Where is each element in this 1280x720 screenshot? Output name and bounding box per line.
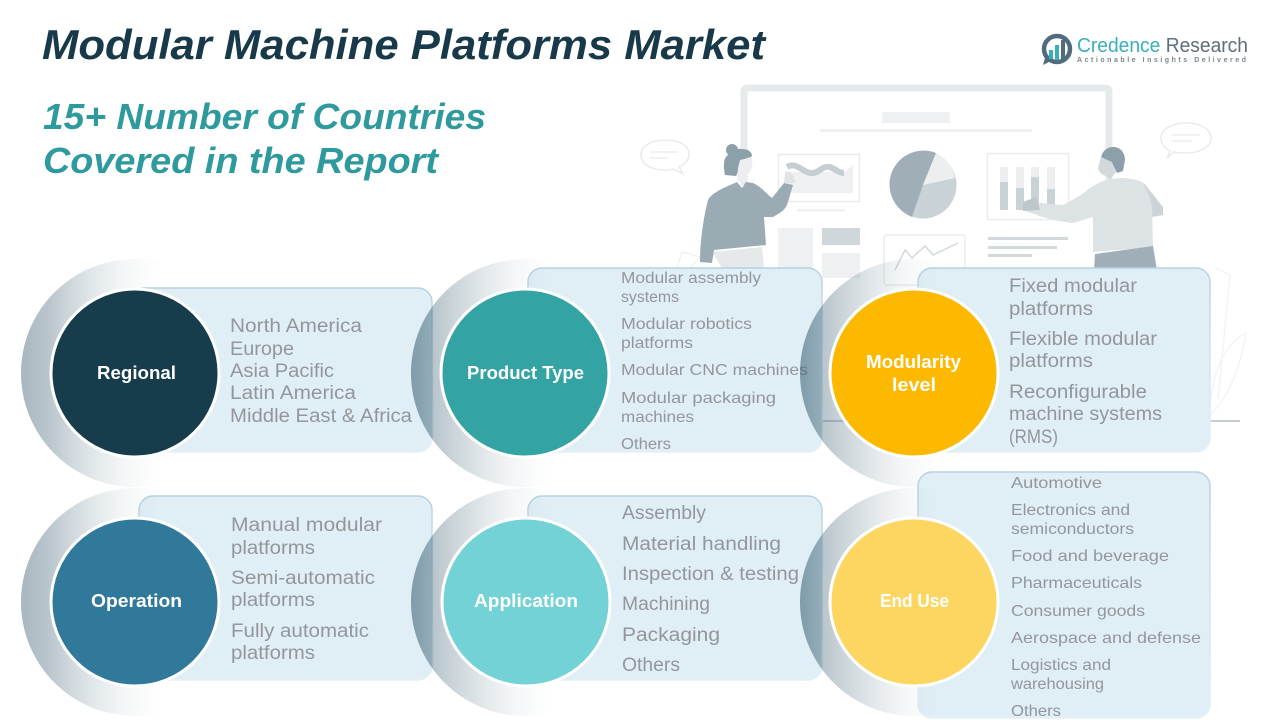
list: Fully automatic — [231, 621, 369, 642]
panel — [130, 288, 432, 452]
circle badge — [51, 518, 219, 686]
list: Others — [622, 655, 680, 676]
list: Manual modular — [231, 515, 383, 536]
circle badge — [830, 289, 998, 457]
panel — [918, 268, 1210, 452]
logo icon — [1043, 36, 1070, 65]
list: Material handling — [622, 534, 781, 555]
pie chart — [889, 151, 956, 218]
logo tagline: Actionable Insights Delivered — [1077, 57, 1246, 64]
list — [622, 503, 799, 676]
subtitle: Covered in the Report — [43, 140, 440, 181]
board subtitle line — [820, 129, 1032, 132]
badge label: Modularity — [866, 352, 961, 372]
segment: Regional — [21, 259, 432, 487]
panel — [918, 472, 1210, 718]
list: Pharmaceuticals — [1011, 575, 1142, 592]
gradient ring — [21, 259, 249, 487]
line chart panel — [884, 235, 965, 285]
logo: Credence Research — [1043, 35, 1248, 65]
gradient ring — [411, 488, 639, 716]
man presenter — [1023, 147, 1163, 270]
decorative leaf — [1205, 268, 1246, 420]
badge label: Operation — [91, 591, 182, 611]
speech bubble left — [641, 140, 689, 174]
list: Reconfigurable — [1009, 382, 1147, 403]
list: Latin America — [230, 383, 356, 404]
list: Automotive — [1011, 475, 1102, 492]
panel — [139, 496, 432, 680]
list: semiconductors — [1011, 521, 1134, 538]
panel — [528, 268, 822, 452]
list: Inspection & testing — [622, 564, 799, 585]
list — [1010, 475, 1201, 720]
subtitle — [43, 96, 486, 181]
list: Asia Pacific — [230, 361, 334, 382]
segment: Modularity level — [800, 259, 1210, 487]
list: Food and beverage — [1011, 548, 1169, 565]
circle badge — [51, 289, 219, 457]
lower left tiles — [778, 228, 860, 278]
circle badge — [441, 289, 609, 457]
logo wordmark: Credence Research — [1077, 35, 1248, 57]
list: warehousing — [1010, 676, 1104, 693]
list: Packaging — [622, 625, 720, 646]
speech bubble right — [1161, 123, 1211, 158]
line area chart panel — [778, 154, 860, 202]
list — [1009, 276, 1162, 448]
list: platforms — [621, 335, 693, 352]
badge label: Regional — [97, 363, 176, 383]
list: Flexible modular — [1009, 329, 1158, 350]
list: Fixed modular — [1009, 276, 1138, 297]
panel — [528, 496, 822, 680]
illustration: presentation board with two presenters — [641, 88, 1246, 421]
list: platforms — [1009, 351, 1093, 372]
list: Electronics and — [1011, 502, 1130, 519]
small chart caption — [797, 209, 845, 212]
list: platforms — [231, 590, 315, 611]
gradient ring — [21, 488, 249, 716]
list: Modular packaging — [621, 390, 776, 407]
circle badge — [442, 518, 610, 686]
segment: End Use — [800, 472, 1210, 720]
gradient ring — [800, 488, 1028, 716]
subtitle: 15+ Number of Countries — [43, 96, 486, 137]
list — [231, 515, 383, 664]
gradient ring — [411, 259, 639, 487]
bar chart panel — [988, 154, 1068, 220]
list: Consumer goods — [1011, 603, 1145, 620]
gradient ring — [800, 259, 1028, 487]
list — [621, 270, 808, 453]
title: Modular Machine Platforms Market — [42, 21, 767, 68]
list: Others — [621, 436, 671, 453]
badge label — [866, 352, 961, 395]
text lines — [988, 237, 1068, 257]
list: platforms — [231, 538, 315, 559]
woman presenter — [677, 144, 795, 268]
segment: Application — [411, 488, 822, 716]
list: Semi-automatic — [231, 568, 375, 589]
list: Others — [1011, 703, 1061, 720]
list: Logistics and — [1011, 657, 1111, 674]
list: Middle East & Africa — [230, 406, 412, 427]
ground line — [822, 420, 1240, 422]
segment: Product Type — [411, 259, 822, 487]
list: systems — [621, 289, 679, 306]
list: North America — [230, 316, 362, 337]
list: machine systems — [1009, 404, 1162, 425]
badge label: level — [892, 375, 936, 395]
list: (RMS) — [1009, 427, 1058, 448]
list: Modular robotics — [621, 316, 752, 333]
list: Assembly — [622, 503, 707, 524]
list: Europe — [230, 339, 294, 360]
list: Modular CNC machines — [621, 362, 808, 379]
list: Machining — [622, 594, 710, 615]
board frame — [744, 88, 1109, 185]
board title bar — [882, 112, 950, 123]
list: platforms — [231, 643, 315, 664]
list: platforms — [1009, 299, 1093, 320]
badge label: Application — [474, 591, 578, 611]
list: machines — [621, 409, 694, 426]
list: Aerospace and defense — [1011, 630, 1201, 647]
list — [230, 316, 412, 427]
badge label: End Use — [880, 591, 949, 611]
segment: Operation — [21, 488, 432, 716]
circle badge — [830, 518, 998, 686]
badge label: Product Type — [467, 363, 584, 383]
list: Modular assembly — [621, 270, 761, 287]
